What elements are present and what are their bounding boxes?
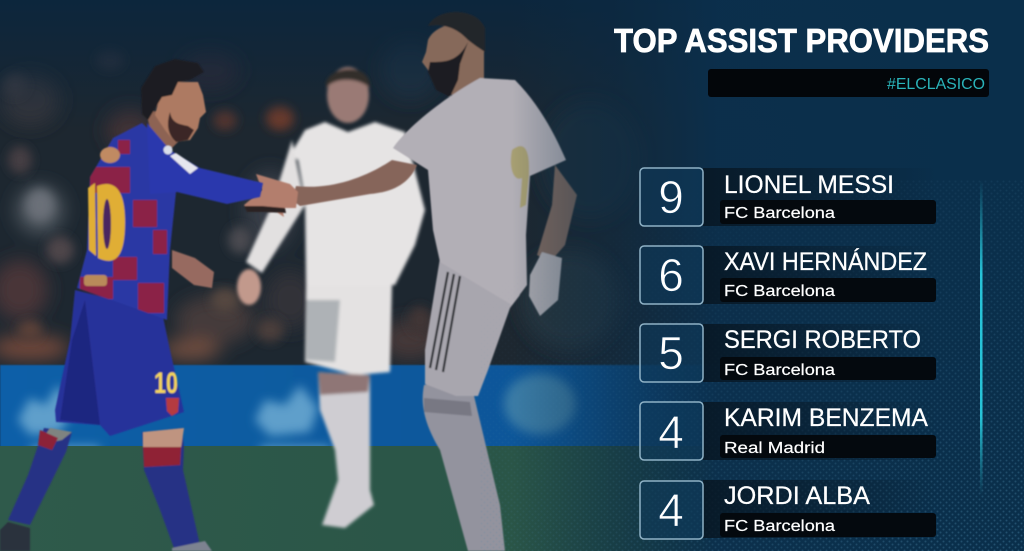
hidden hand: [172, 250, 214, 288]
shorts number: 10: [154, 367, 178, 400]
vertical accent line: [980, 180, 982, 495]
title: TOP ASSIST PROVIDERS: [614, 22, 989, 59]
shirt: [77, 123, 176, 320]
bandaged hand: [529, 252, 562, 316]
ranking list: [640, 168, 936, 539]
shirt number: [511, 146, 529, 208]
advertising board: [0, 365, 1024, 460]
hair: [141, 59, 204, 120]
row: Karim Benzema: Real Madrid: [724, 440, 825, 457]
grey shirt: [393, 78, 566, 305]
La Liga patch: [170, 153, 198, 174]
badge: [164, 146, 172, 154]
row: Jordi Alba: 4: [658, 484, 684, 536]
row: Karim Benzema: [640, 402, 936, 460]
lower leg: [423, 378, 505, 551]
outstretched arm: [292, 160, 417, 206]
halftone dot texture: [480, 180, 1024, 551]
legs: [318, 372, 374, 528]
white shirt: [290, 122, 425, 285]
nameplate: [100, 147, 120, 163]
neck: [146, 110, 178, 150]
shirt checks: [80, 140, 167, 313]
beard: [428, 42, 468, 97]
row: Sergi Roberto: 5: [658, 327, 684, 379]
handshake hands: [244, 174, 298, 217]
player: Benzema: [244, 12, 577, 551]
hashtag bar: #ELCLASICO: [887, 76, 985, 93]
left sleeve: [246, 140, 305, 273]
row: Jordi Alba: [640, 480, 936, 539]
near shoe: [172, 541, 212, 551]
head: [327, 67, 369, 123]
outstretched sleeve: [147, 123, 263, 204]
far leg: [8, 428, 72, 525]
near leg: [142, 428, 200, 551]
face: [155, 82, 206, 142]
row: Xavi Hernández: 6: [658, 249, 684, 301]
shirt number 10: [88, 183, 96, 256]
hair: [428, 12, 485, 52]
row: Jordi Alba: FC Barcelona: [724, 518, 835, 535]
far shoe: [0, 522, 30, 551]
row: Lionel Messi: LIONEL MESSI: [724, 171, 894, 199]
player: Valverde in background: [237, 67, 425, 528]
row: Lionel Messi: 9: [658, 171, 684, 223]
player: Messi: [0, 59, 263, 551]
sponsor: [84, 275, 107, 286]
shorts: [55, 290, 184, 436]
hashtag bar: [708, 69, 989, 97]
neck and face: [422, 23, 484, 95]
row: Xavi Hernández: FC Barcelona: [724, 283, 835, 300]
row: Xavi Hernández: [640, 246, 936, 304]
row: Lionel Messi: FC Barcelona: [724, 205, 835, 222]
row: Karim Benzema: KARIM BENZEMA: [724, 404, 928, 432]
crowd: [0, 0, 1024, 370]
shorts: [425, 258, 520, 396]
row: Jordi Alba: JORDI ALBA: [724, 482, 870, 510]
shorts stripes: [430, 272, 460, 372]
row: Sergi Roberto: [640, 324, 936, 382]
row: Xavi Hernández: XAVI HERNÁNDEZ: [724, 247, 927, 276]
beard: [168, 112, 194, 142]
row: Sergi Roberto: SERGI ROBERTO: [724, 326, 921, 354]
row: Sergi Roberto: FC Barcelona: [724, 362, 835, 379]
row: Lionel Messi: [640, 168, 936, 226]
shorts: [305, 285, 392, 375]
fist: [237, 269, 261, 305]
row: Karim Benzema: 4: [658, 406, 684, 458]
far arm: [537, 165, 577, 262]
pitch: [0, 446, 1024, 551]
shorts crest: [166, 398, 179, 416]
